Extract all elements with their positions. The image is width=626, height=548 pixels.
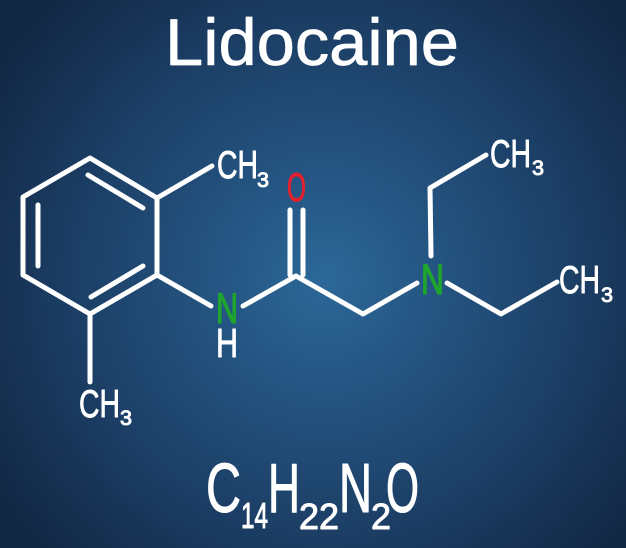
- title: Lidocaine: [165, 5, 459, 79]
- label: amide N-H: [216, 285, 238, 366]
- upper ethyl chain: [430, 155, 486, 256]
- lower ethyl chain: [447, 282, 557, 314]
- chemical formula: N: [339, 449, 372, 527]
- carbonyl double bond: [290, 210, 303, 275]
- bond: ring to upper methyl: [157, 166, 212, 198]
- label: lower ring CH3: CH: [79, 383, 120, 426]
- label: amide N-H: H: [216, 320, 238, 366]
- label: amide N-H: N: [216, 285, 238, 333]
- bond chain: carbonyl to amine nitrogen: [296, 276, 417, 314]
- label: amine nitrogen: N: [421, 256, 444, 304]
- bond: ring to lower methyl: [88, 314, 92, 382]
- label: lower ring CH3: 3: [120, 407, 132, 430]
- chemical formula: O: [386, 449, 419, 527]
- benzene ring: [23, 158, 157, 314]
- label: upper ring CH3: CH: [217, 144, 258, 187]
- chemical formula: [206, 449, 419, 537]
- label: lower ethyl CH3: 3: [601, 284, 613, 307]
- chemical formula: 2: [371, 496, 391, 537]
- chemical formula: 22: [299, 496, 339, 537]
- bond: ring to amide nitrogen: [157, 275, 211, 306]
- structural formula bonds: [23, 155, 557, 382]
- chemical formula: C: [206, 449, 241, 527]
- label: upper ring CH3: 3: [257, 169, 269, 192]
- label: lower ethyl CH3: CH: [559, 259, 600, 302]
- label: upper ethyl CH3: 3: [532, 157, 544, 180]
- label: upper ethyl CH3: CH: [490, 133, 531, 176]
- label: oxygen: O: [287, 166, 306, 210]
- bond: amide nitrogen to carbonyl carbon: [243, 276, 296, 306]
- chemical formula: H: [268, 449, 300, 527]
- chemical formula: 14: [241, 495, 268, 536]
